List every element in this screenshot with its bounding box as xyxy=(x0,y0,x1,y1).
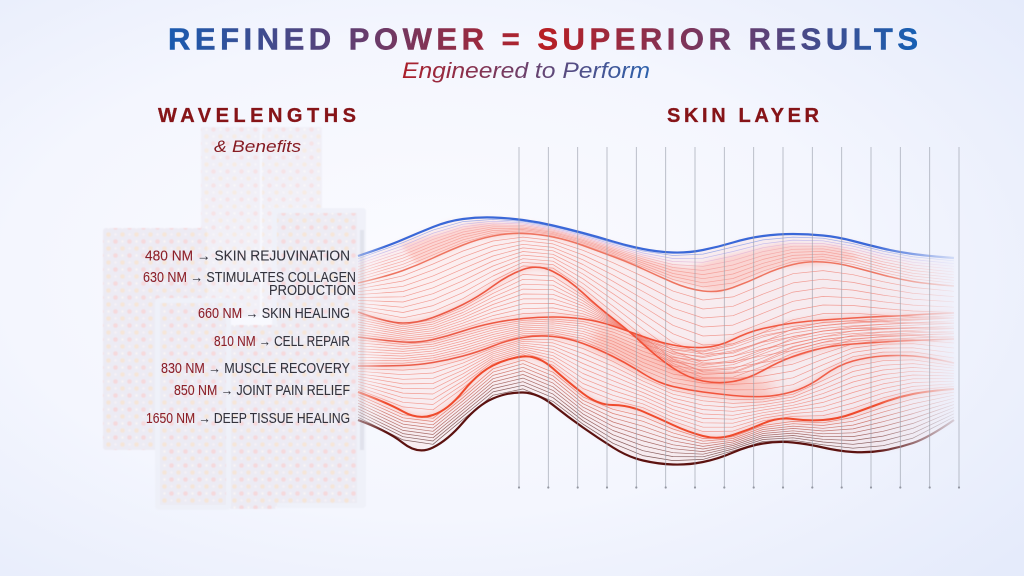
curve: 660 nm xyxy=(358,267,954,383)
curve: 810 nm xyxy=(358,313,954,348)
heading: skin layer: SKIN LAYER xyxy=(667,105,820,127)
band: 660 nm to 810 nm xyxy=(358,274,954,378)
light therapy panels xyxy=(103,127,366,510)
panel: front left xyxy=(155,298,231,510)
label: 480 nm: 480 NM → SKIN REJUVINATION xyxy=(145,248,350,264)
subtitle: Engineered to Perform xyxy=(402,58,650,83)
heading: wavelengths: WAVELENGTHS xyxy=(158,105,356,127)
panel: large left xyxy=(103,228,207,450)
curve: 1650 nm xyxy=(358,392,954,465)
glow: upper band xyxy=(400,222,860,293)
curve: 480 nm xyxy=(358,217,954,258)
band: 830 nm to 850 nm xyxy=(358,339,954,432)
label: 630 nm xyxy=(143,270,356,299)
sub-heading: benefits: & Benefits xyxy=(214,137,302,156)
glow: converging bands xyxy=(590,325,780,398)
wavelength benefit list xyxy=(143,248,356,427)
band: 810 nm to 830 nm xyxy=(358,318,954,390)
panel: large right xyxy=(272,208,366,508)
curve: 630 nm xyxy=(358,233,954,292)
band: 630 nm to 660 nm xyxy=(358,237,954,372)
curve: 830 nm xyxy=(358,336,954,397)
panel: back right tower xyxy=(262,127,322,317)
glow behind key curves xyxy=(358,267,954,438)
panel: front centre xyxy=(229,325,277,509)
label: 1650 nm: 1650 NM → DEEP TISSUE HEALING xyxy=(146,411,350,427)
band: 480 nm to 630 nm xyxy=(358,219,954,287)
label: 850 nm: 850 NM → JOINT PAIN RELIEF xyxy=(174,383,350,399)
label: 830 nm: 830 NM → MUSCLE RECOVERY xyxy=(161,361,350,377)
curve: 850 nm xyxy=(358,356,954,438)
title: REFINED POWER = SUPERIOR RESULTS xyxy=(168,22,918,56)
label: 660 nm: 660 NM → SKIN HEALING xyxy=(198,306,350,322)
panel: back left tower xyxy=(201,127,260,317)
vertical depth lines xyxy=(518,147,960,489)
skin layer wave chart xyxy=(358,217,954,465)
soft tint across skin layers xyxy=(358,217,954,465)
label: 630 nm: PRODUCTION xyxy=(269,283,356,299)
label: 810 nm: 810 NM → CELL REPAIR xyxy=(214,334,350,350)
band: 850 nm to 1650 nm xyxy=(358,360,954,461)
label: 630 nm: 630 NM → STIMULATES COLLAGEN xyxy=(143,270,356,286)
